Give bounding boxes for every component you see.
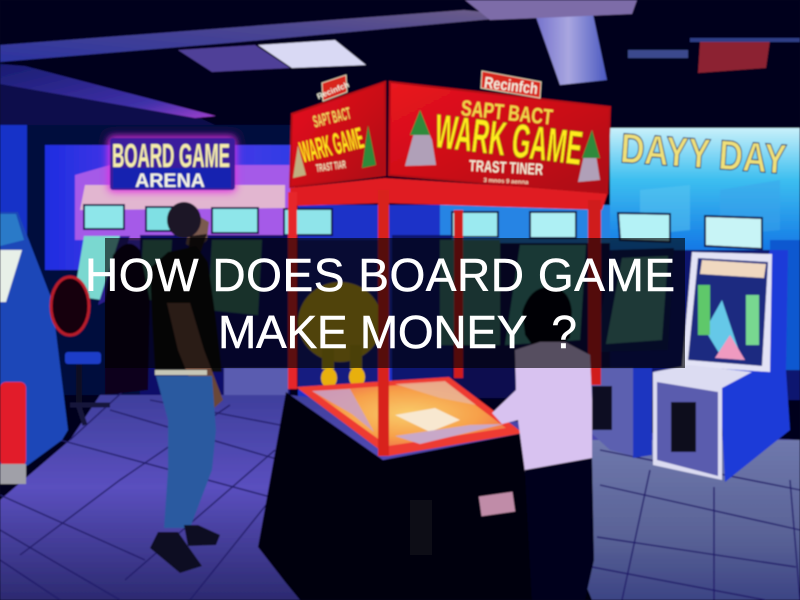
red sign panels: WARK GAME — [297, 122, 367, 169]
right panel of sign — [389, 71, 610, 193]
coin slot — [410, 500, 432, 555]
fire extinguisher — [0, 382, 26, 484]
title — [85, 249, 675, 358]
right panel of sign: Recinfch — [483, 75, 539, 98]
office chair — [51, 277, 110, 425]
mural: dayy day — [605, 124, 800, 400]
sign: board game arena — [108, 136, 236, 192]
right panel of sign: SAPT BACT — [460, 95, 554, 130]
ceiling — [0, 0, 800, 125]
man standing — [150, 202, 223, 573]
title: HOW DOES BOARD GAME — [85, 249, 675, 301]
right panel of sign: TRAST TINER — [469, 158, 544, 179]
wall behind the frame — [298, 205, 610, 400]
sign: board game arena: ARENA — [135, 171, 205, 192]
bright game board — [296, 377, 523, 456]
title: MAKE MONEY ? — [218, 306, 577, 358]
background person — [105, 244, 150, 395]
left panel of sign — [290, 75, 385, 187]
right panel of sign: WARK GAME — [432, 105, 585, 176]
left cabinet — [0, 212, 68, 478]
boy playing — [492, 287, 594, 600]
title band — [105, 238, 685, 368]
right arcade machines — [590, 248, 790, 482]
machine label on table — [479, 492, 515, 516]
red sign panels — [290, 71, 610, 193]
right panel of sign: 3 mnos 9 aenna — [483, 178, 529, 186]
game table cloth — [258, 392, 592, 600]
back row arcade machines — [74, 205, 762, 400]
sign: board game arena: BOARD GAME — [112, 137, 230, 174]
left panel of sign: TRAST TIAR — [315, 159, 347, 175]
left panel of sign: SAPT BACT — [311, 104, 353, 131]
floor tiles — [0, 385, 800, 600]
red display frame — [288, 178, 608, 456]
left panel of sign: Recinfch — [316, 80, 351, 101]
back wall left — [0, 125, 295, 425]
yellow character toy — [298, 282, 382, 388]
